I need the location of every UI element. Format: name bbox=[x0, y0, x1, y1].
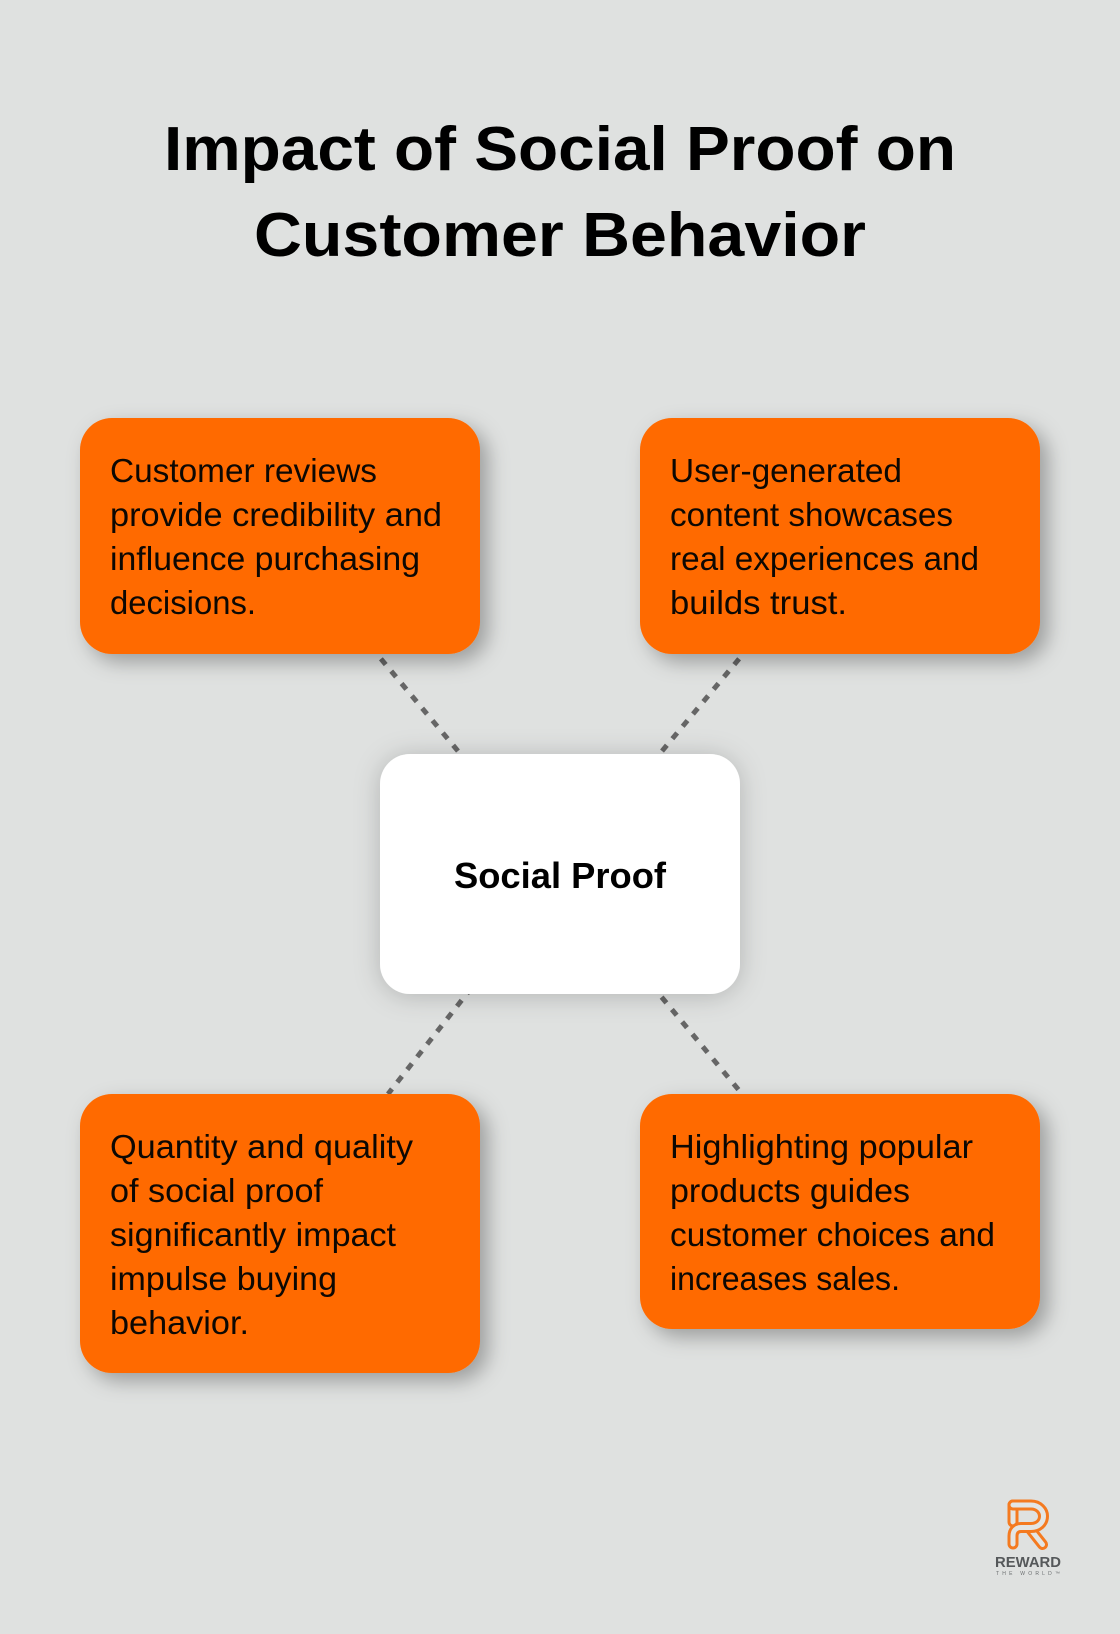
panel: customer reviews: influence purchasing bbox=[110, 540, 420, 577]
panel: quantity and quality: of social proof bbox=[110, 1172, 324, 1209]
panel: user-generated content: real experiences and bbox=[670, 540, 979, 577]
panel: popular products bbox=[640, 1094, 1040, 1329]
panel: user-generated content: content showcases bbox=[670, 496, 953, 533]
panel: customer reviews: decisions. bbox=[110, 584, 256, 621]
panel: quantity and quality bbox=[80, 1094, 480, 1373]
connector: user content to social proof bbox=[662, 659, 739, 751]
panel: popular products: customer choices and bbox=[670, 1216, 995, 1253]
panel: quantity and quality: behavior. bbox=[110, 1304, 249, 1341]
panel: customer reviews: provide credibility and bbox=[110, 496, 442, 533]
panel: social proof centre bbox=[380, 754, 740, 994]
icon: R mark bbox=[1013, 1505, 1044, 1544]
title: Impact of Social Proof on bbox=[164, 115, 956, 184]
panel: user-generated content: User-generated bbox=[670, 452, 902, 489]
panel: user-generated content: builds trust. bbox=[670, 584, 847, 621]
tagline: THE WORLD™ bbox=[996, 1571, 1060, 1577]
connector: reviews to social proof bbox=[381, 659, 458, 751]
panel: popular products: Highlighting popular bbox=[670, 1128, 973, 1165]
panel: customer reviews bbox=[80, 418, 480, 654]
panel: user-generated content bbox=[640, 418, 1040, 654]
wordmark: REWARD bbox=[995, 1554, 1061, 1571]
panel: popular products: increases sales. bbox=[670, 1260, 900, 1297]
panel: quantity and quality: significantly impact bbox=[110, 1216, 396, 1253]
logo: Reward the World bbox=[995, 1505, 1061, 1577]
connector: social proof to quantity and quality bbox=[388, 988, 472, 1094]
connector: social proof to popular products bbox=[662, 997, 738, 1090]
panel: customer reviews: Customer reviews bbox=[110, 452, 377, 489]
panel: social proof centre: Social Proof bbox=[454, 855, 667, 896]
panel: quantity and quality: impulse buying bbox=[110, 1260, 337, 1297]
title: Customer Behavior bbox=[254, 201, 866, 270]
panel: quantity and quality: Quantity and quality bbox=[110, 1128, 414, 1165]
panel: popular products: products guides bbox=[670, 1172, 910, 1209]
title bbox=[164, 115, 956, 270]
